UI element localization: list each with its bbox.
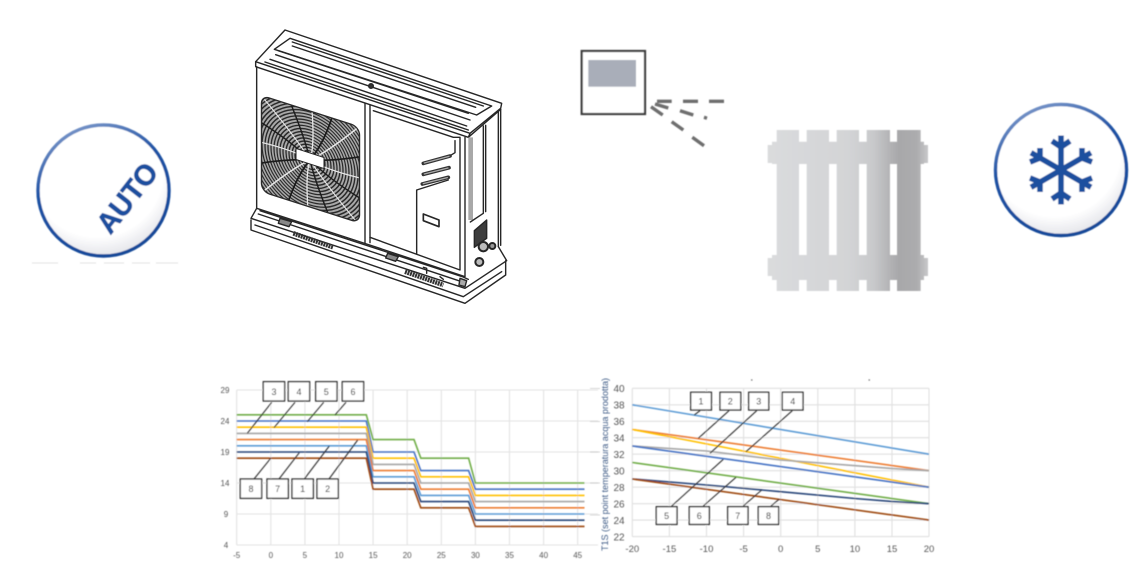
chart 2 y axis labels: 26 [613, 500, 625, 510]
chart 2 curve numbers: 8 [766, 511, 771, 521]
chart 2 y axis labels: 40 [613, 384, 625, 395]
signal dashes [651, 101, 724, 146]
chart 2 axis title: T1S (set point temperatura acqua prodotta) [599, 378, 610, 551]
chart x axis labels: 5 [303, 551, 308, 560]
icon: wall thermostat with signal [582, 51, 724, 146]
curve numbers: 1 [300, 484, 305, 494]
chart: flow temperature step curves [221, 382, 598, 560]
chart 2 y axis labels [613, 384, 625, 544]
chart x axis labels: 45 [573, 551, 583, 560]
chart 2 number boxes [656, 392, 803, 524]
chart 2 curve numbers: 1 [698, 396, 704, 406]
chart grid [237, 390, 598, 545]
chart 2 x axis labels [625, 544, 934, 555]
curve numbers: 6 [350, 387, 356, 397]
chart 2 y axis labels: 34 [613, 434, 625, 444]
unit base [251, 208, 507, 303]
curve numbers: 4 [296, 387, 302, 397]
unit front casing [257, 67, 465, 277]
chart 2 curve numbers: 4 [790, 396, 795, 406]
curve numbers [248, 387, 356, 494]
chart y axis labels: 24 [221, 417, 230, 426]
chart x axis labels [233, 551, 583, 560]
chart 2 curve numbers: 7 [735, 511, 740, 521]
chart step lines [237, 415, 584, 526]
chart 2 grid [590, 388, 929, 537]
chart x axis labels: 40 [539, 551, 549, 560]
fan grille [260, 96, 360, 222]
chart 2 x axis labels: 15 [887, 544, 897, 555]
curve numbers: 8 [248, 484, 254, 494]
chart 2 y axis labels: 24 [613, 516, 625, 527]
chart 2 y axis labels: 38 [613, 400, 625, 412]
chart x axis labels: -5 [233, 551, 241, 560]
chart 2 x axis labels: -10 [700, 544, 713, 555]
chart 2 x axis labels: -5 [739, 544, 748, 555]
chart 2 y axis labels: 30 [613, 466, 625, 478]
chart: set point water temperature curves [590, 378, 934, 555]
chart 2 x axis labels: -20 [625, 544, 639, 555]
icon: auto mode button: AUTO [91, 157, 165, 240]
icon: cooling mode button [996, 104, 1126, 236]
chart x axis labels: 15 [369, 551, 378, 560]
chart 2 x axis labels: 5 [815, 544, 820, 555]
icon: radiator [768, 130, 928, 291]
curve number boxes [240, 382, 364, 498]
chart 2 y axis labels: 28 [613, 483, 625, 494]
chart x axis labels: 10 [335, 551, 344, 560]
chart 2 curve numbers: 5 [664, 511, 669, 521]
chart leader lines [247, 402, 358, 479]
chart y axis labels [221, 386, 230, 550]
chart x axis labels: 35 [505, 551, 514, 560]
snowflake glyph [1030, 136, 1092, 204]
curve numbers: 2 [325, 484, 330, 494]
curve numbers: 3 [271, 387, 277, 397]
thermostat display [588, 60, 636, 87]
chart 2 curve numbers: 2 [728, 396, 733, 406]
chart 2 curves [632, 405, 929, 520]
chart 2 curve numbers: 6 [697, 511, 702, 521]
chart 2 y axis labels: 36 [613, 417, 625, 428]
curve numbers: 7 [275, 484, 280, 494]
chart x axis labels: 25 [437, 551, 446, 560]
curve numbers: 5 [324, 387, 329, 397]
chart 2 curve numbers: 3 [756, 396, 761, 406]
chart 2 curve numbers [664, 396, 795, 521]
chart y axis labels: 4 [224, 541, 229, 550]
thermostat body [582, 51, 645, 114]
icon: auto mode button [32, 125, 178, 263]
chart y axis labels: 14 [221, 479, 230, 488]
chart 2 y axis labels: 22 [613, 532, 625, 544]
chart 2 x axis labels: -15 [663, 544, 676, 555]
chart y axis labels: 29 [221, 386, 230, 395]
chart x axis labels: 0 [269, 551, 274, 560]
chart 2 y axis labels: 32 [613, 450, 625, 461]
unit side panel [470, 109, 501, 266]
chart 2 x axis labels: 20 [924, 544, 934, 555]
unit top cover [256, 30, 502, 137]
chart y axis labels: 9 [224, 510, 229, 519]
chart y axis labels: 19 [221, 448, 230, 457]
chart 2 leader lines [672, 411, 792, 506]
chart 2 x axis labels: 0 [778, 544, 783, 555]
chart 2 x axis labels: 10 [850, 544, 860, 555]
chart x axis labels: 30 [471, 551, 480, 560]
icon: outdoor heat pump unit [240, 30, 507, 303]
chart x axis labels: 20 [403, 551, 412, 560]
